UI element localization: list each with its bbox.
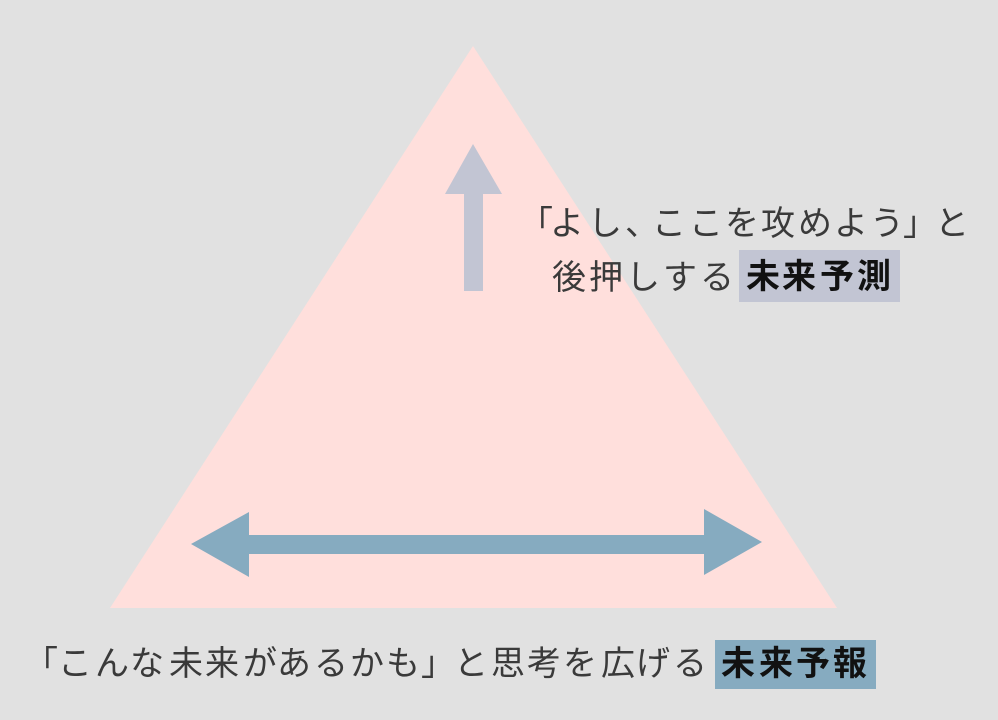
text: upper line one: 「よし、ここを攻めよう」と bbox=[519, 205, 969, 243]
arrow: horizontal double bbox=[191, 509, 762, 577]
label: future prediction bbox=[739, 250, 900, 302]
label: future prediction: 未来予測 bbox=[746, 258, 891, 296]
label: future forecast: 未来予報 bbox=[721, 645, 867, 683]
arrow: upward bbox=[445, 144, 502, 291]
text: upper line two: 後押しする bbox=[552, 259, 734, 297]
triangle bbox=[110, 46, 837, 608]
text: bottom line: 「こんな未来があるかも」と思考を広げる bbox=[24, 645, 707, 683]
